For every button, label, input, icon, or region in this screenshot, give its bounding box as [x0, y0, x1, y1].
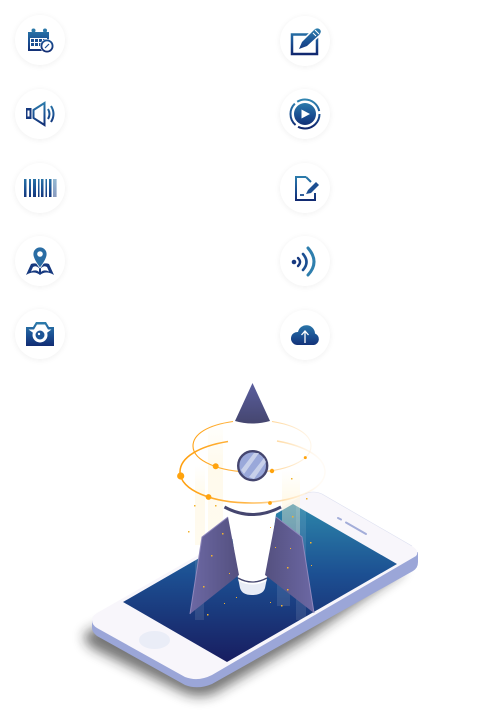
icon: pen and box: [280, 16, 330, 68]
left fin edge: [190, 517, 228, 614]
icon: signal waves: [280, 236, 330, 288]
icon: document with pencil: [280, 163, 330, 214]
phone shadow: [84, 540, 405, 696]
orbit planets: [177, 456, 307, 505]
nozzle ring: [238, 578, 267, 582]
phone side edge: [92, 552, 418, 687]
orbit rings: [180, 422, 325, 503]
star particles: [188, 478, 312, 616]
icon: cloud upload: [280, 310, 330, 362]
icon: map pin: [14, 236, 66, 288]
left fin: [190, 517, 239, 614]
phone: [92, 492, 418, 687]
rocket body: [228, 507, 277, 578]
icon: calendar: [14, 15, 66, 66]
icon: speaker: [14, 89, 66, 140]
light beams: [195, 420, 306, 620]
rocket nose cone: [235, 383, 270, 424]
upper orbit: [193, 422, 311, 472]
nozzle white band: [238, 577, 267, 584]
lower orbit: [180, 441, 325, 503]
speaker slot: [338, 518, 366, 534]
phone outline highlight: [305, 492, 412, 546]
phone screen: [123, 504, 397, 662]
icon: play disc: [280, 89, 330, 140]
icon: barcode: [14, 163, 66, 214]
home button: [139, 631, 170, 649]
body collar: [224, 507, 281, 514]
rocket: [190, 383, 314, 614]
phone top face: [92, 492, 417, 679]
icon: camera: [14, 309, 66, 360]
rocket nozzle: [238, 578, 267, 595]
porthole: [238, 451, 267, 480]
right fin edge: [276, 517, 314, 613]
right fin: [265, 517, 314, 613]
